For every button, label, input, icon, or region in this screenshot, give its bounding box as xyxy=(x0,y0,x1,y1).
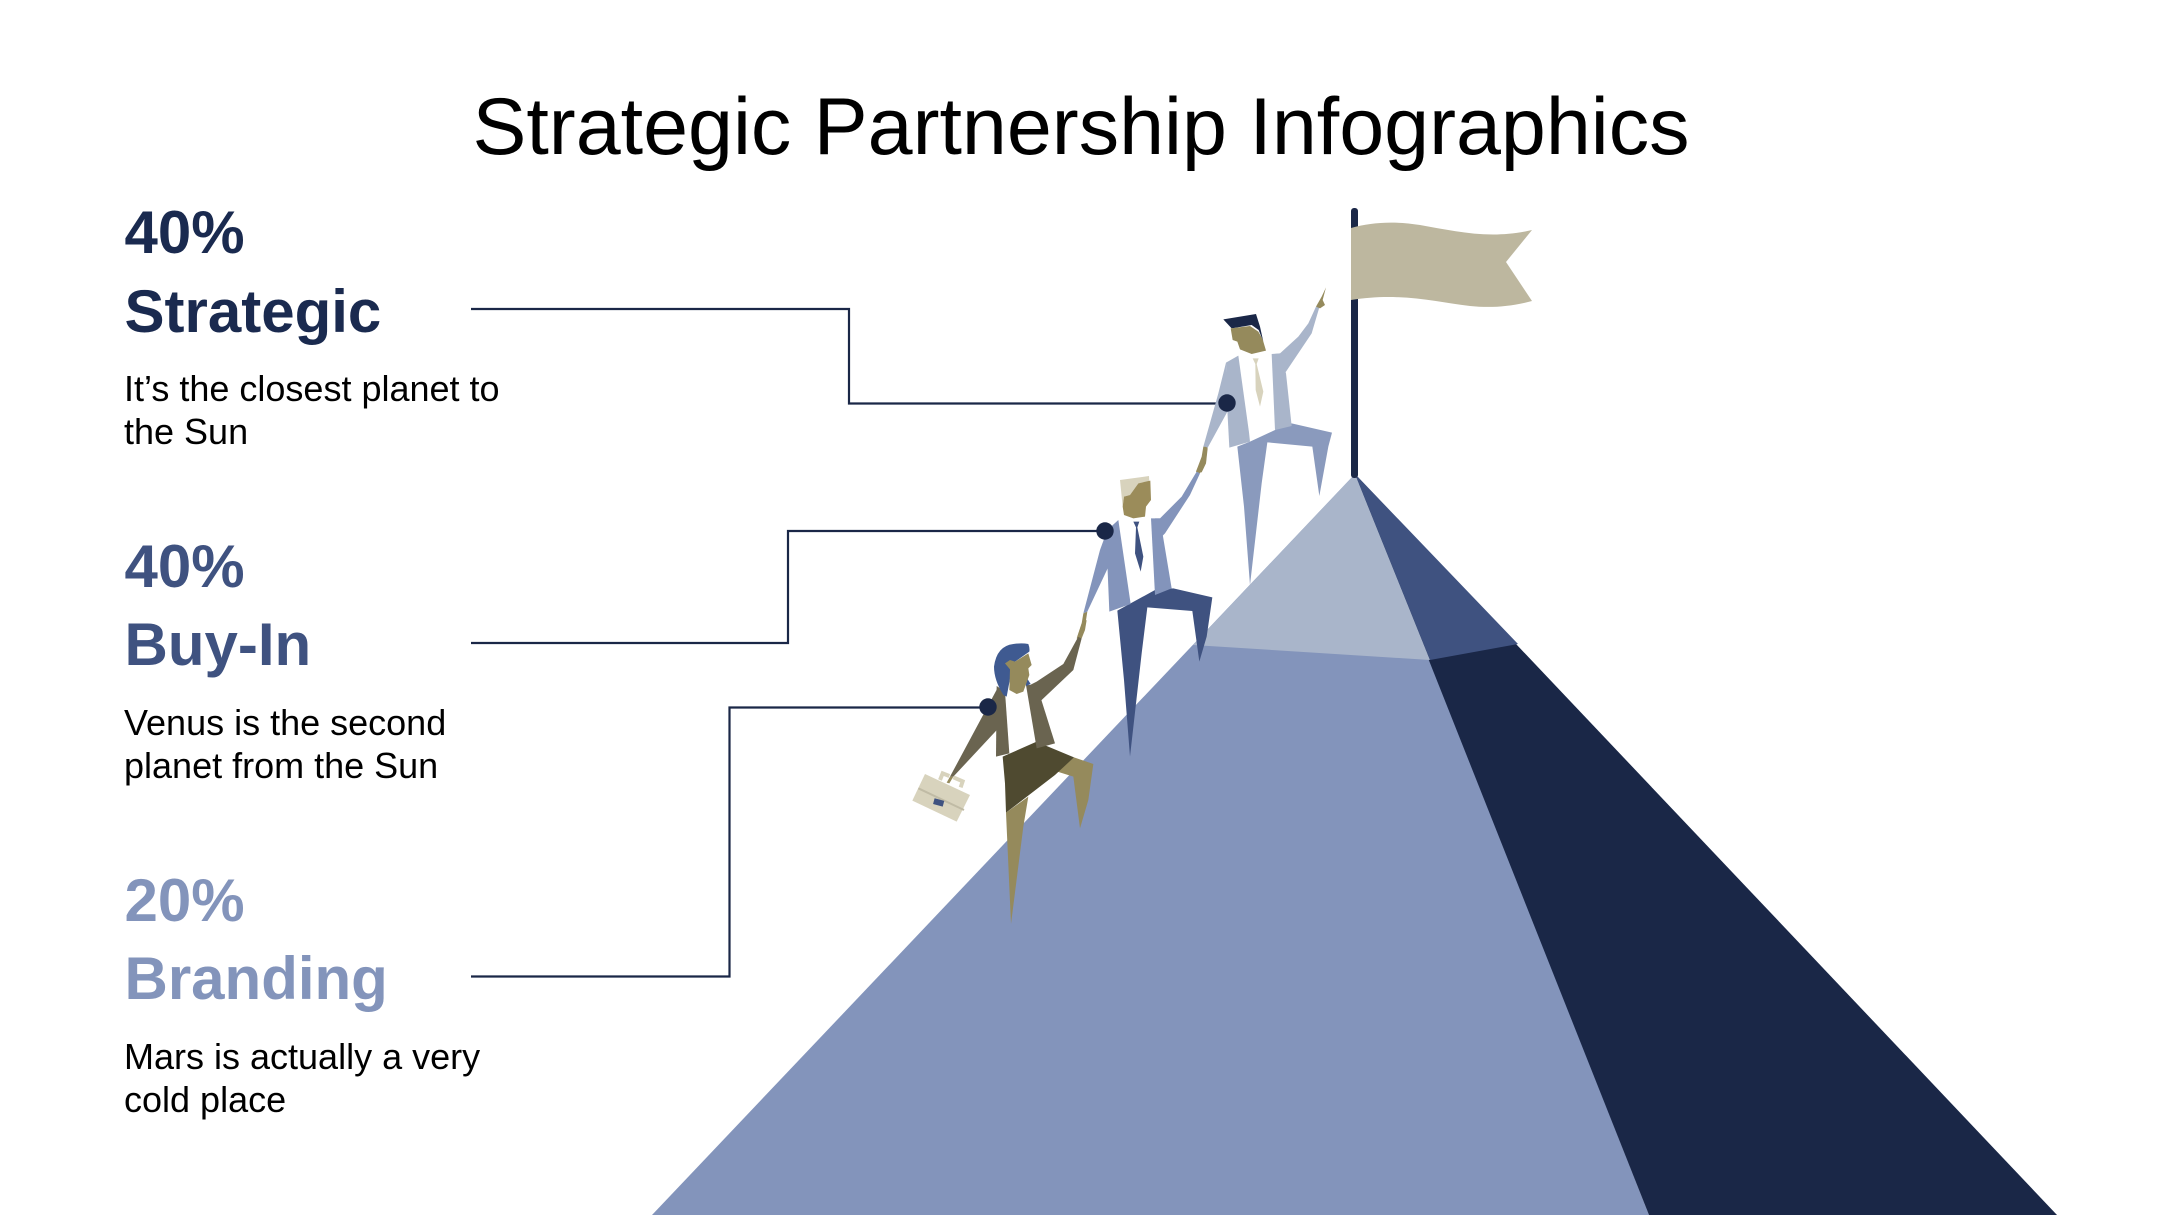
text block: Strategic: It’s the closest planet to xyxy=(124,368,500,409)
text block: Buy-In xyxy=(124,533,446,786)
dot: Buy-In xyxy=(1096,522,1114,540)
icon: briefcase xyxy=(912,773,970,822)
connector line: Buy-In xyxy=(471,531,1105,643)
text block: Strategic: Strategic xyxy=(124,278,381,345)
figure: top climber xyxy=(1196,287,1332,585)
text block: Branding: Mars is actually a very xyxy=(124,1036,480,1077)
text block: Branding: Branding xyxy=(124,945,388,1012)
text block: Strategic xyxy=(124,199,500,452)
figure: bottom climber with briefcase xyxy=(912,620,1093,924)
flag and pole xyxy=(1351,208,1532,478)
connector line: Branding xyxy=(471,708,988,976)
text block: Branding: 20% xyxy=(124,867,245,934)
text block: Branding: cold place xyxy=(124,1079,286,1120)
figure: middle climber xyxy=(1077,447,1212,757)
text block: Buy-In: Venus is the second xyxy=(124,702,446,743)
text block: Buy-In: Buy-In xyxy=(124,611,311,678)
text block: Strategic: 40% xyxy=(124,199,245,266)
connector line: Strategic xyxy=(471,309,1227,404)
dot: Branding xyxy=(979,698,997,716)
text block: Buy-In: planet from the Sun xyxy=(124,745,438,786)
title: Strategic Partnership Infographics xyxy=(472,82,1690,172)
text block: Branding xyxy=(124,867,480,1120)
dot: Strategic xyxy=(1218,394,1236,412)
text block: Buy-In: 40% xyxy=(124,533,245,600)
mountain xyxy=(652,474,2057,1215)
text block: Strategic: the Sun xyxy=(124,411,248,452)
